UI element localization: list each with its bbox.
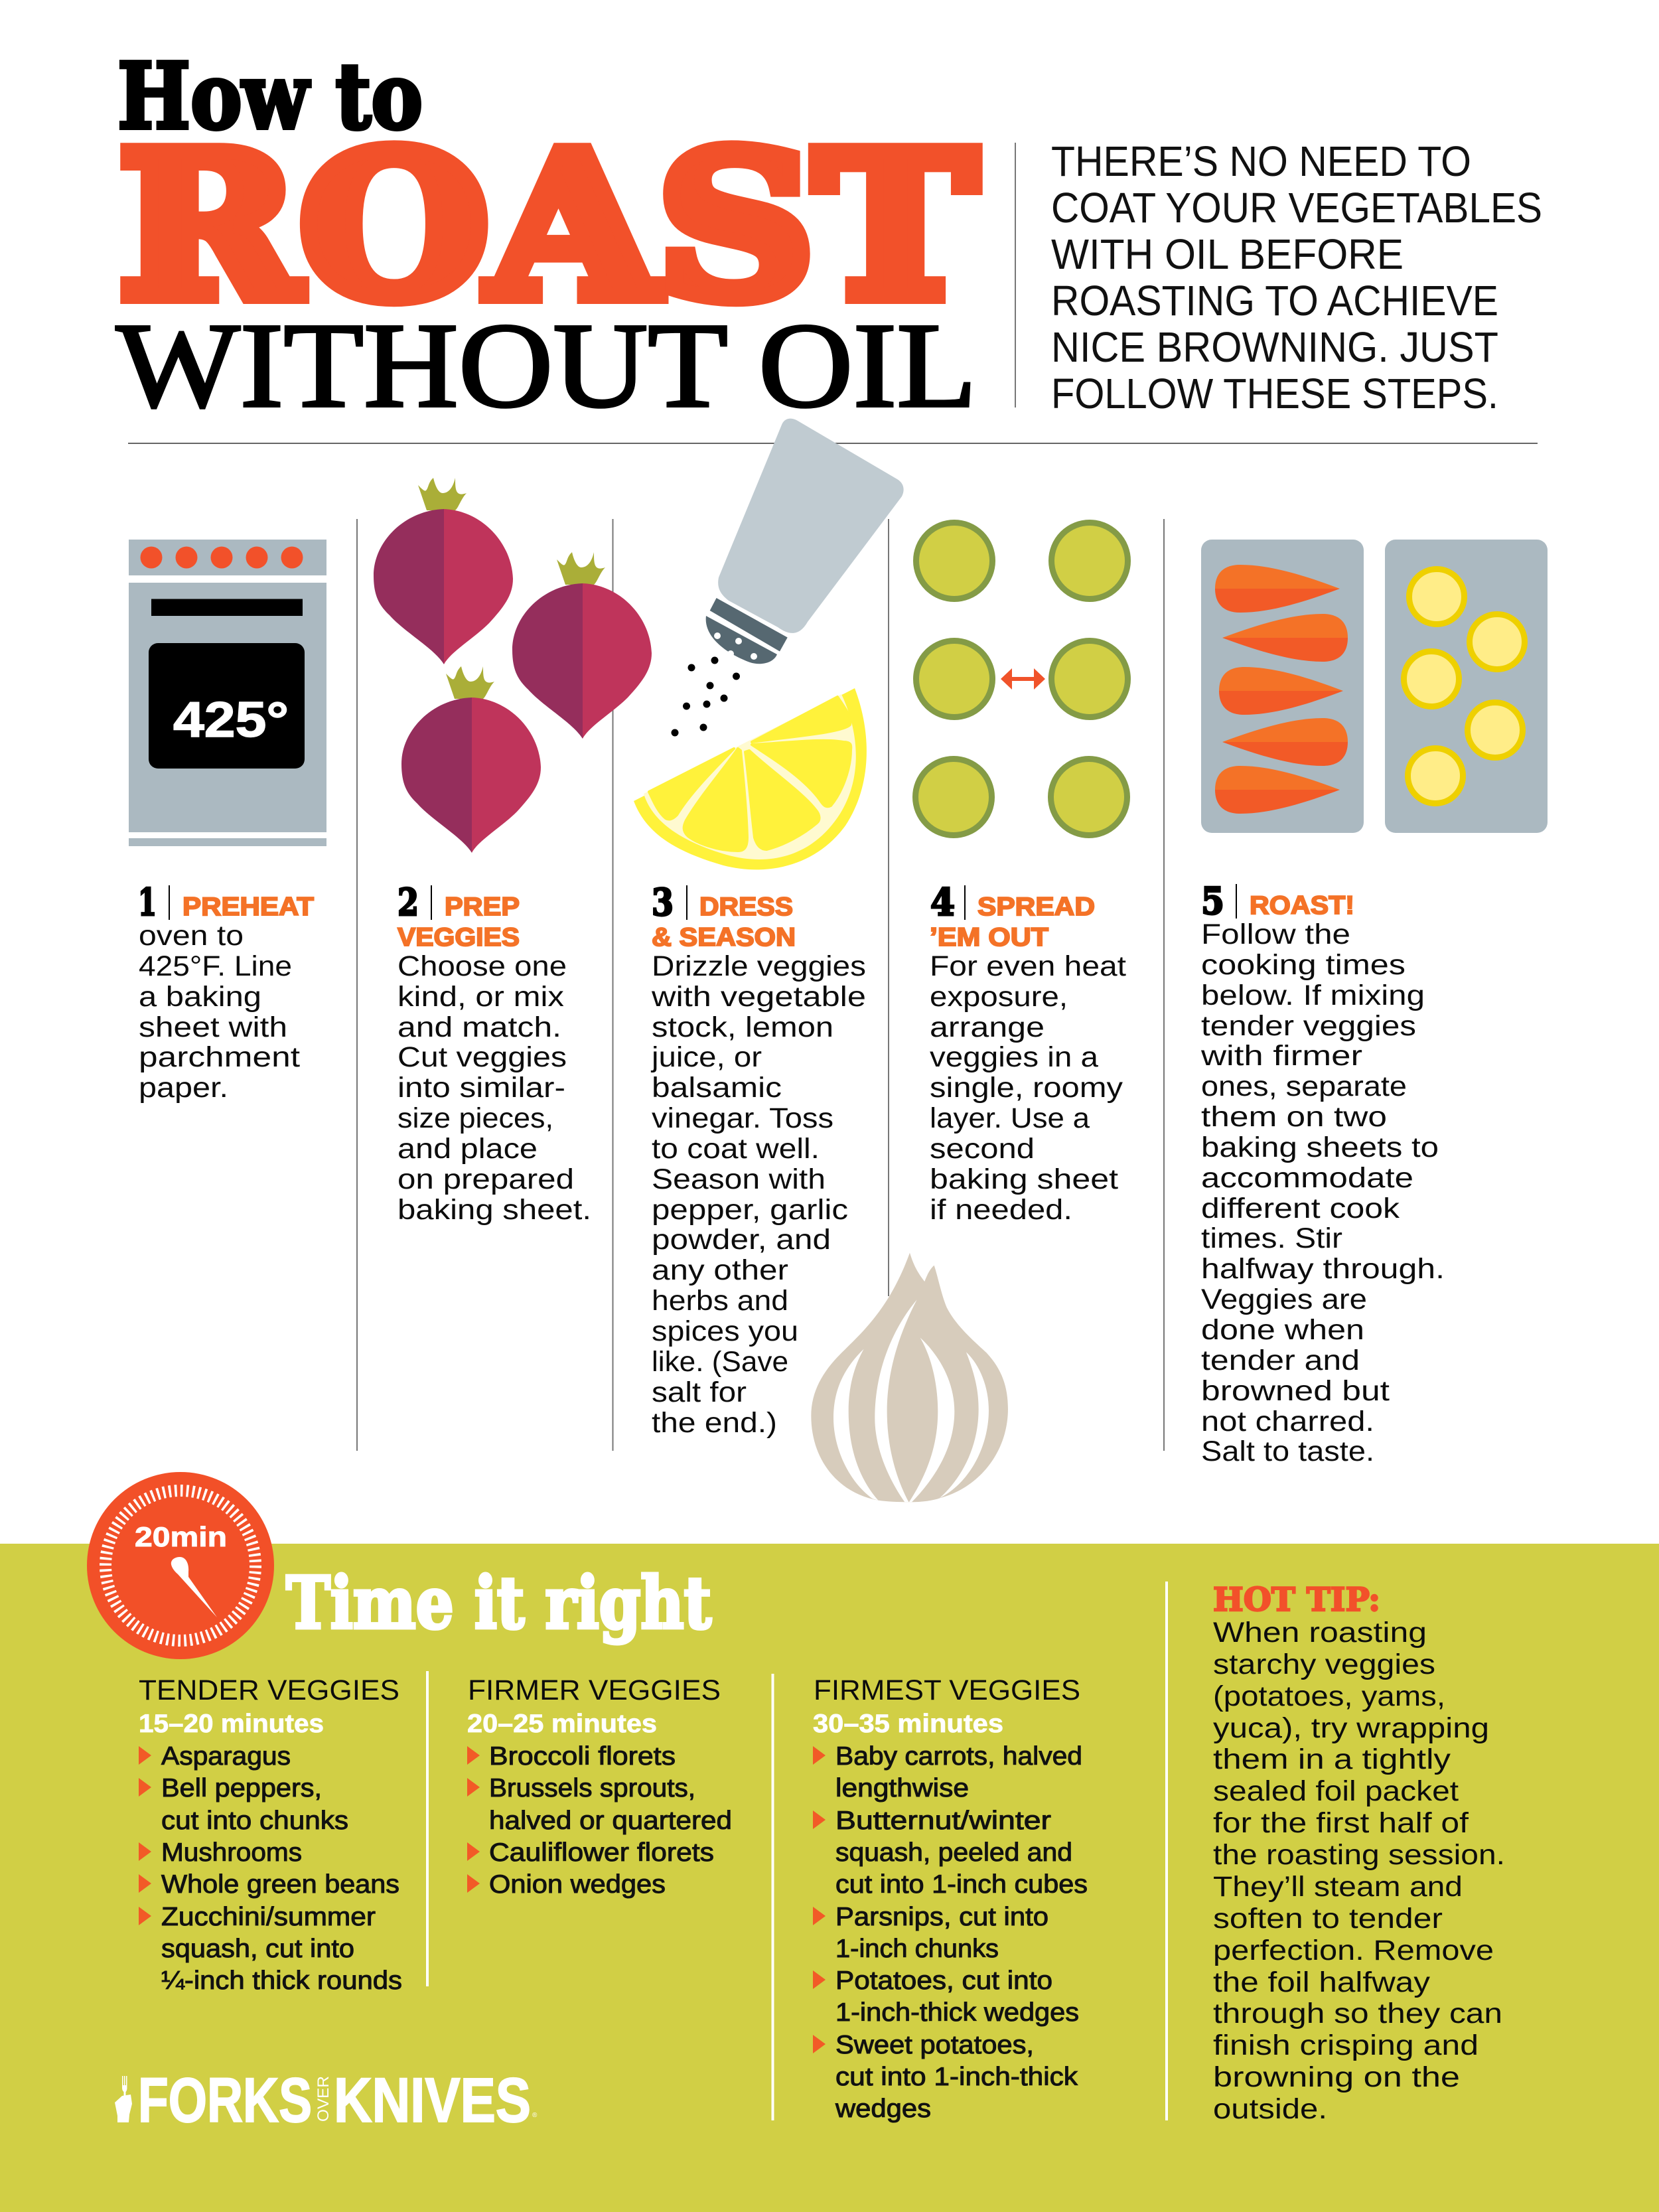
step 5: 5 [1201, 879, 1224, 923]
arrow: spread apart [1001, 668, 1045, 690]
column: tender veggies [139, 1674, 402, 1995]
step 5: Salt to taste. [1201, 1436, 1374, 1467]
step 3: balsamic [652, 1072, 782, 1104]
panel: hot tip: the roasting session. [1213, 1839, 1505, 1871]
step 2: baking sheet. [397, 1194, 591, 1226]
step 1: oven to [139, 920, 244, 952]
step 5: not charred. [1201, 1406, 1374, 1438]
column: firmest veggies: wedges [835, 2095, 931, 2123]
icon: timer dial: 20min [135, 1521, 227, 1552]
icon: zucchini rounds [916, 523, 1128, 835]
panel: hot tip: browning on the [1213, 2061, 1460, 2093]
step 3: any other [652, 1254, 788, 1286]
column: firmer veggies: Brussels sprouts, [489, 1774, 695, 1803]
logo: forks over knives: ® [532, 2112, 538, 2119]
column: firmest veggies: squash, peeled and [835, 1838, 1072, 1867]
step 3: spices you [652, 1315, 798, 1347]
step 2 [397, 881, 591, 1226]
column: tender veggies: Mushrooms [161, 1838, 302, 1867]
step 1: a baking [139, 981, 261, 1013]
panel: hot tip: yuca), try wrapping [1213, 1712, 1489, 1744]
step 2: 2 [397, 881, 419, 924]
logo: forks over knives: FORKS [138, 2065, 312, 2136]
column: firmest veggies: Butternut/winter [835, 1806, 1051, 1835]
step 3: Season with [652, 1163, 826, 1195]
column: firmest veggies: 30–35 minutes [813, 1710, 1003, 1738]
step 3: vinegar. Toss [652, 1102, 833, 1134]
panel: hot tip: They’ll steam and [1213, 1871, 1463, 1903]
intro text: THERE’S NO NEED TO [1051, 137, 1471, 185]
panel: hot tip: outside. [1213, 2093, 1327, 2125]
column: firmer veggies: 20–25 minutes [467, 1710, 657, 1738]
title [116, 43, 977, 433]
heading: time it right: Time it right [286, 1562, 711, 1645]
intro text: COAT YOUR VEGETABLES [1051, 184, 1542, 232]
step 3: herbs and [652, 1285, 788, 1317]
column: firmer veggies: Cauliflower florets [489, 1838, 714, 1867]
step 4: For even heat [930, 950, 1126, 982]
step 5: different cook [1201, 1193, 1400, 1224]
step 3 [650, 881, 866, 1439]
step 3: like. (Save [652, 1346, 788, 1378]
step 5: tender and [1201, 1345, 1360, 1376]
step 4: exposure, [930, 981, 1068, 1013]
column: firmest veggies: lengthwise [835, 1774, 969, 1803]
step 4 [930, 881, 1126, 1226]
step 5: Veggies are [1201, 1284, 1367, 1315]
column: tender veggies: Asparagus [161, 1742, 291, 1771]
step 5 [1200, 879, 1445, 1467]
panel: hot tip: for the first half of [1213, 1807, 1469, 1839]
step 1: 425°F. Line [139, 950, 292, 982]
intro text: FOLLOW THESE STEPS. [1051, 370, 1498, 417]
logo: forks over knives: KNIVES [334, 2065, 531, 2136]
step 5: halfway through. [1201, 1253, 1445, 1285]
step 5: Follow the [1201, 919, 1350, 950]
step 1 [138, 881, 314, 1104]
step 5: accommodate [1201, 1162, 1413, 1194]
column: tender veggies: Bell peppers, [161, 1774, 322, 1803]
step 4: if needed. [930, 1194, 1072, 1226]
column: tender veggies: cut into chunks [161, 1806, 348, 1835]
step 3: & SEASON [652, 923, 796, 952]
step 3: juice, or [650, 1041, 762, 1073]
step 5: ones, separate [1201, 1070, 1407, 1102]
step 3: powder, and [652, 1224, 831, 1256]
column: firmest veggies: cut into 1-inch cubes [835, 1870, 1088, 1899]
icon: baking sheet with potatoes [1385, 540, 1548, 833]
panel: hot tip: them in a tightly [1213, 1743, 1451, 1775]
title: WITHOUT OIL [116, 298, 977, 433]
icon: onion [811, 1253, 1008, 1502]
panel: time it right band [0, 1544, 1659, 2212]
step 4: 4 [930, 881, 955, 924]
panel: hot tip: soften to tender [1213, 1903, 1443, 1935]
column: firmest veggies: 1-inch-thick wedges [835, 1998, 1079, 2027]
logo: forks over knives [115, 2065, 538, 2136]
column: firmest veggies: cut into 1-inch-thick [835, 2063, 1078, 2091]
panel: hot tip [1213, 1580, 1505, 2125]
column: firmest veggies: Potatoes, cut into [835, 1966, 1052, 1995]
step 3: pepper, garlic [652, 1194, 848, 1226]
column: firmest veggies: Parsnips, cut into [835, 1903, 1048, 1931]
panel: hot tip: finish crisping and [1213, 2029, 1479, 2061]
step 2: and place [397, 1133, 538, 1165]
step 4: baking sheet [930, 1163, 1118, 1195]
icon: oven [129, 540, 326, 846]
step 4: layer. Use a [930, 1102, 1090, 1134]
intro text: ROASTING TO ACHIEVE [1051, 277, 1498, 325]
step 1: parchment [139, 1041, 300, 1073]
step 2: PREP [445, 893, 520, 921]
step 5: ROAST! [1250, 891, 1354, 920]
step 5: cooking times [1201, 949, 1406, 981]
step 4: second [930, 1133, 1035, 1165]
column: firmer veggies: FIRMER VEGGIES [468, 1674, 721, 1706]
icon: pepper shaker [672, 419, 904, 737]
step 4: arrange [930, 1011, 1045, 1043]
icon: baking sheet with carrots [1201, 540, 1364, 833]
step 2: and match. [397, 1011, 561, 1043]
column: firmest veggies: Baby carrots, halved [835, 1742, 1082, 1771]
icon: lemon wedge [634, 688, 867, 869]
column: tender veggies: ¼-inch thick rounds [161, 1966, 402, 1995]
step 5: browned but [1201, 1375, 1390, 1407]
column: tender veggies: 15–20 minutes [139, 1710, 324, 1738]
step 1: 1 [138, 881, 157, 924]
title: ROAST [119, 109, 976, 343]
step 3: stock, lemon [652, 1011, 833, 1043]
step 3: 3 [652, 881, 674, 924]
step 1: PREHEAT [182, 893, 314, 921]
panel: hot tip: the foil halfway [1213, 1966, 1431, 1998]
step 5: times. Stir [1201, 1222, 1342, 1254]
step 5: below. If mixing [1201, 980, 1425, 1011]
icon: beet 2 [512, 552, 652, 739]
step 3: salt for [652, 1376, 747, 1408]
step 5: done when [1201, 1314, 1364, 1346]
icon: timer dial [87, 1472, 274, 1659]
intro text: NICE BROWNING. JUST [1051, 323, 1498, 371]
column: firmer veggies: halved or quartered [489, 1806, 732, 1835]
step 3: Drizzle veggies [652, 950, 866, 982]
panel: hot tip: perfection. Remove [1213, 1935, 1494, 1966]
column: firmer veggies: Onion wedges [489, 1870, 666, 1899]
column: firmer veggies [467, 1674, 732, 1899]
logo: forks over knives: OVER [315, 2076, 332, 2122]
icon: beet 3 [401, 666, 541, 853]
intro text: WITH OIL BEFORE [1051, 230, 1404, 278]
panel: hot tip: (potatoes, yams, [1213, 1680, 1445, 1712]
step 2: size pieces, [397, 1102, 553, 1134]
step 5: them on two [1201, 1101, 1387, 1133]
panel: hot tip: When roasting [1213, 1617, 1427, 1649]
step 3: the end.) [652, 1407, 777, 1439]
step 4: ’EM OUT [930, 923, 1048, 952]
step 2: on prepared [397, 1163, 574, 1195]
step 1: sheet with [139, 1011, 287, 1043]
column: firmest veggies: FIRMEST VEGGIES [814, 1674, 1080, 1706]
column: firmest veggies: Sweet potatoes, [835, 2031, 1034, 2059]
column: firmer veggies: Broccoli florets [489, 1742, 676, 1771]
column: tender veggies: squash, cut into [161, 1935, 354, 1963]
step 2: Cut veggies [397, 1041, 567, 1073]
step 1: paper. [139, 1072, 228, 1104]
step 5: with firmer [1200, 1040, 1362, 1072]
title: How to [117, 43, 423, 150]
column: firmest veggies [813, 1674, 1088, 2123]
step 4: SPREAD [977, 893, 1095, 921]
icon: beet 1 [374, 478, 513, 664]
panel: hot tip: through so they can [1213, 1998, 1502, 2029]
panel: hot tip: sealed foil packet [1213, 1775, 1459, 1807]
column: firmest veggies: 1-inch chunks [835, 1935, 999, 1963]
step 5: baking sheets to [1201, 1132, 1439, 1163]
intro text [1051, 137, 1542, 417]
step 4: veggies in a [930, 1041, 1098, 1073]
step 2: kind, or mix [397, 981, 565, 1013]
panel: hot tip: HOT TIP: [1213, 1580, 1380, 1619]
icon: oven: 425° [173, 692, 289, 747]
column: tender veggies: Whole green beans [161, 1870, 399, 1899]
step 2: Choose one [397, 950, 567, 982]
step 3: to coat well. [652, 1133, 820, 1165]
step 4: single, roomy [930, 1072, 1123, 1104]
column: tender veggies: Zucchini/summer [161, 1903, 376, 1931]
step 5: tender veggies [1201, 1010, 1416, 1042]
step 3: DRESS [699, 893, 793, 921]
step 2: VEGGIES [397, 923, 520, 952]
column: tender veggies: TENDER VEGGIES [139, 1674, 399, 1706]
step 2: into similar- [397, 1072, 565, 1104]
step 3: with vegetable [651, 981, 866, 1013]
panel: hot tip: starchy veggies [1213, 1649, 1435, 1680]
